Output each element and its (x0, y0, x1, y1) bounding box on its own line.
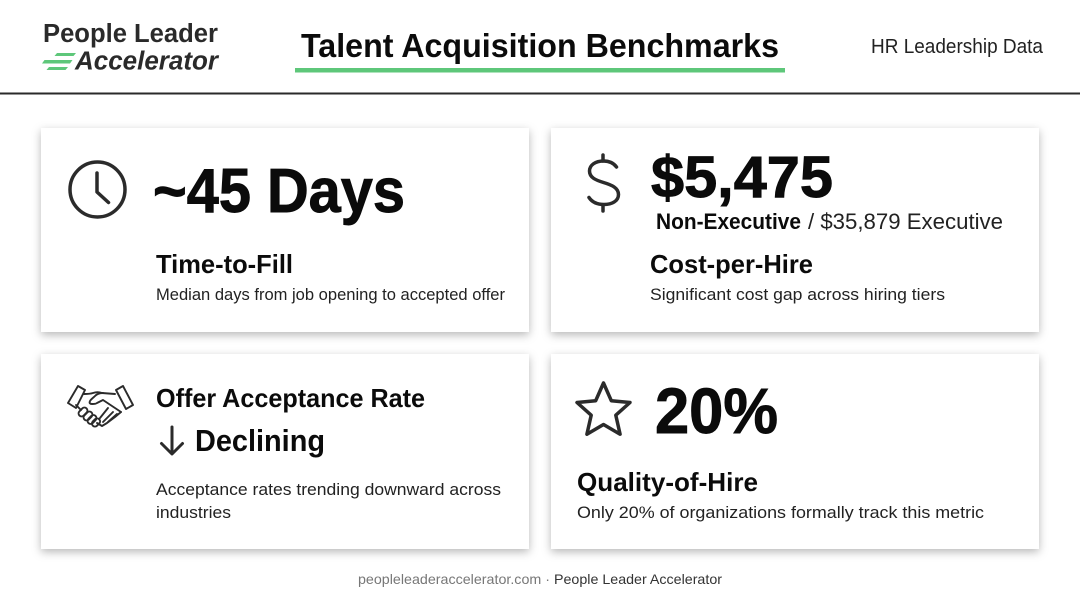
sub-metric: non-executive vs executive: Non-Executive (656, 209, 801, 234)
metric: declining: Declining (195, 423, 325, 458)
logo (42, 20, 220, 76)
heading: offer acceptance rate: Offer Acceptance Rate (156, 383, 425, 413)
title: Talent Acquisition Benchmarks (301, 28, 779, 65)
sub-metric: non-executive vs executive (656, 209, 1003, 234)
header label: HR Leadership Data (871, 36, 1044, 58)
description: quality-of-hire: Only 20% of organizations formally track this metric (577, 503, 985, 522)
description: offer acceptance rate: Acceptance rates trending downward across (156, 480, 501, 499)
title underline (295, 68, 785, 72)
description: time-to-fill: Median days from job opening to accepted offer (156, 285, 505, 304)
sub-metric: non-executive vs executive: / $35,879 Executive (808, 209, 1003, 234)
footer (358, 571, 722, 587)
heading: quality-of-hire: Quality-of-Hire (577, 467, 758, 497)
logo: People Leader (43, 20, 218, 48)
metric: 45 days: ~45 Days (153, 157, 405, 226)
footer: peopleleaderaccelerator.com · (358, 571, 550, 587)
panel: offer acceptance rate (41, 354, 529, 549)
icon: handshake (68, 386, 133, 428)
heading: time-to-fill: Time-to-Fill (156, 249, 293, 279)
icon: clock (70, 162, 125, 217)
panel: cost-per-hire (551, 128, 1039, 332)
metric: 5,475 dollars: $5,475 (651, 145, 833, 210)
description: offer acceptance rate: industries (156, 503, 231, 522)
panel: quality-of-hire (551, 354, 1039, 549)
arrow: declining (162, 427, 182, 454)
icon: dollar sign (589, 155, 618, 211)
description: offer acceptance rate (156, 480, 501, 522)
metric: 20 percent: 20% (655, 375, 778, 447)
description: cost-per-hire: Significant cost gap across hiring tiers (650, 285, 945, 304)
footer: People Leader Accelerator (554, 571, 722, 587)
logo: Accelerator (74, 48, 220, 76)
icon: star (577, 383, 630, 434)
panel: time-to-fill (41, 128, 529, 332)
heading: cost-per-hire: Cost-per-Hire (650, 249, 813, 279)
